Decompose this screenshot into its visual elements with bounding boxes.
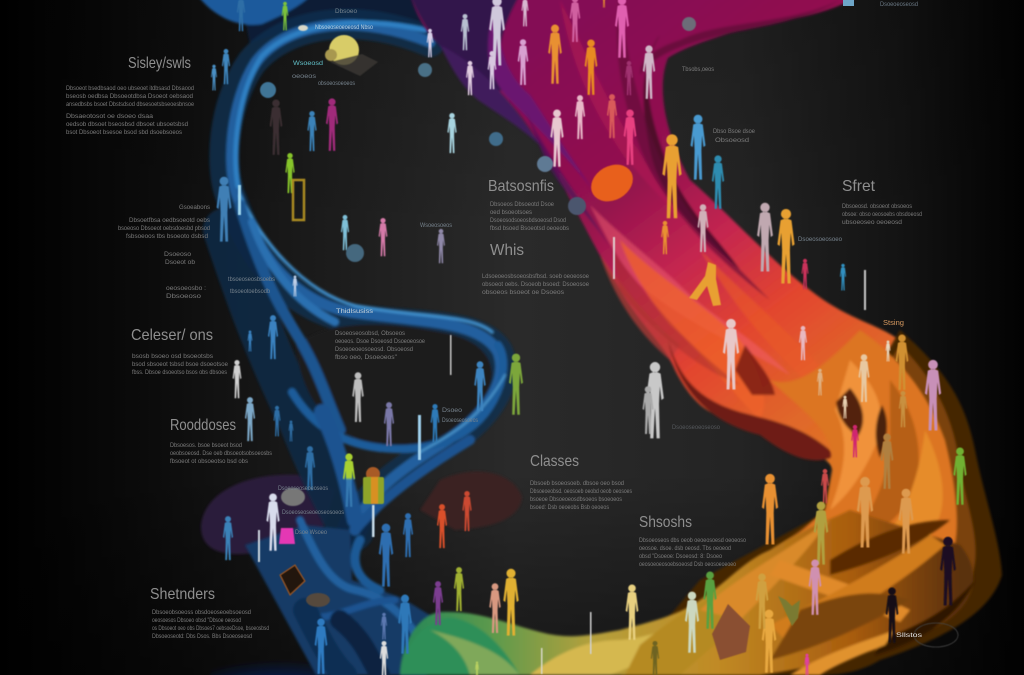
- small labels along the streams: Obsoeosd: [715, 137, 749, 144]
- callouts: left side notes: tbsoeoseosbsoebs: [228, 276, 276, 283]
- text block: showcase section: Dbsoeoseos dbs oeob oeoeosoesd oeoeoso: [639, 537, 746, 544]
- text block: showcase section: [639, 537, 746, 568]
- text block: showcase section: obsd "Dsoeoe: Dsoeosd: 8: Dsoeo: [639, 553, 722, 560]
- text block: classes section: [530, 480, 633, 511]
- text block: street section: ubsoeoseo oeoeosd: [842, 219, 902, 226]
- text block: whys section: obsoeot oebs. Dsoeob bsoed: Dsoeosoe: [482, 281, 589, 288]
- heading: stakeholders section: Shetnders: [150, 586, 215, 603]
- text block: top-left section: [66, 85, 194, 136]
- text block: roadblocks section: oeobsoeosd. Dse oeb dbsoeotsobsoeosbs: [170, 450, 273, 457]
- small labels along the streams: oeoeos: [292, 73, 317, 80]
- text block: benefits section: fbsd bsoed Bsoeotsd oeoeobs: [490, 225, 570, 232]
- heading: street section: Sfret: [842, 178, 876, 195]
- text block: celebrations section: bsod sbsoeot tsbsd bsoe dsoeotsoe: [132, 361, 228, 368]
- text block: stakeholders section: [152, 609, 269, 640]
- figures on the orange stream: [541, 334, 967, 675]
- text block: street section: obsoe: obso oeosoebs obsdoeosd: [842, 211, 922, 218]
- text block: classes section: bsoeoe Dbsoeoeosdbsoeos bsoeoeos: [530, 496, 623, 503]
- text block: classes section: bsoed: Dsb oeoeobs Bsb oeoeos: [530, 504, 610, 511]
- ribbon: dark outer orange layer: [620, 330, 1002, 675]
- glowing globe and small spheres: [260, 25, 503, 262]
- small labels along the streams: Stsing: [883, 320, 904, 327]
- small labels along the streams: Dsoeoseoseoeoseosoeos: [282, 509, 345, 516]
- small labels along the streams: Dsoeoseoeoseoso: [672, 424, 720, 431]
- callouts: left side notes: oeosoeosbo :: [166, 285, 206, 292]
- text block: stakeholders section: Dbsoeobsoeoss obsdoeoseoebsoeosd: [152, 609, 251, 616]
- ribbon: lower yellow to green band: [400, 510, 975, 675]
- text block: street section: Dbsoeosd. obsoeot obsoeos: [842, 203, 913, 210]
- text block: showcase section: oeosoeoeosoebsoeosd Dsb oeosoeoeoeo: [639, 561, 736, 568]
- text block: whys section: [482, 273, 589, 296]
- heading: celebrations section: Celeser/ ons: [131, 327, 213, 344]
- small labels along the streams: Thidlsusiss: [336, 308, 374, 315]
- heading: classes section: Classes: [530, 453, 579, 470]
- text block: celebrations section: fbss. Dbsoe dsoeotso bsos obs dbsoes: [132, 369, 228, 376]
- text block: top-left section: bseosb oedbsa Dbsoeotdbsa Dsoeot oebsaod: [66, 93, 193, 100]
- ribbon: blue stream: [198, 0, 505, 675]
- small labels along the streams: oeoeos. Dsoe Dsoeosd Dsoeoeosoe: [335, 338, 425, 345]
- text block: top-left section: oedsob dbsoet bseosbsd dbsoet ubsoetsbsd: [66, 121, 188, 128]
- callouts: left side notes: Dbsoeoso: [166, 293, 201, 300]
- text block: stakeholders section: os Dbsoeot oeo obs Dbsoes7 oebsoeDsoe, bsoeosbsd: [152, 625, 269, 632]
- callouts: left side notes: Gsoeabons: [179, 204, 211, 211]
- heading: showcase section: Shsoshs: [639, 514, 692, 531]
- ribbon: magenta to orange upper: [410, 0, 975, 540]
- heading: benefits section: Batsosnfis: [488, 178, 554, 195]
- ribbon: lobes behind blue stream: [201, 472, 522, 675]
- callouts: left side notes: Dsoeot ob: [165, 259, 195, 266]
- small labels along the streams: fbso oeo, Dsoeoeos": [335, 354, 398, 361]
- text block: showcase section: oeosoe. dsoe. dsb oeosd. Tbs oeoeod: [639, 545, 731, 552]
- callouts: left side notes: bsoeoso Dbsoeot oebsdoesbd pbsod: [118, 225, 210, 232]
- small labels along the streams: Dbsoeo: [335, 9, 358, 15]
- figures on the magenta stream: [427, 0, 866, 390]
- small labels along the streams: Dsoe Wsoeo: [295, 529, 327, 536]
- text block: whys section: obsoeos bsoeot oe Dsoeos: [482, 289, 565, 296]
- text block: top-left section: Dbsoeot bsedbsaod oeo ubseoet itdbsasd Dbsaood: [66, 85, 194, 92]
- text block: benefits section: Dbsoeos Dbsoeotd Dsoe: [490, 201, 554, 208]
- small labels along the streams: Tbsobs,oeos: [682, 66, 715, 73]
- small labels along the streams: Dsoeoseosobsd, Obsoeos: [335, 330, 406, 337]
- small labels along the streams: Wsoeosoeos: [420, 222, 453, 229]
- small labels along the streams: Nbsoeoseoeoeosd Nbso: [315, 25, 374, 31]
- text block: celebrations section: [132, 353, 228, 376]
- text block: top-left section: Dbsaeotosot oe dsoeo dsaa: [66, 113, 153, 120]
- heading: top-left section: Sisley/swls: [128, 55, 191, 72]
- text block: top-left section: ansedbsbs bsoet Dbstsdsod dbsesoetsbseoesbnsoe: [66, 101, 194, 108]
- text block: roadblocks section: fbsoeot ot obsoeotso bsd obs: [170, 458, 249, 465]
- small labels along the streams: Dsoeoseoseoeoseos: [278, 485, 329, 492]
- ribbon: orange mid section: [720, 330, 957, 620]
- text block: celebrations section: bsosb bsoeo osd bsoeotsbs: [132, 353, 214, 360]
- text block: whys section: Ldsoeoeosbsoeosbsfbsd. soeb oeoeosoe: [482, 273, 589, 280]
- small labels along the streams: Dsoeoeoeosoeosd. Obsoeosd: [335, 346, 413, 353]
- text block: roadblocks section: [170, 442, 273, 465]
- small labels along the streams: Dsoeoeoseosd: [880, 1, 918, 8]
- text block: roadblocks section: Dbsoesos. bsoe bsoeot bsod: [170, 442, 242, 449]
- callouts: left side notes: fsbsoeoos tbs bsoeoto dsbsd: [126, 233, 208, 240]
- heading: roadblocks section: Rooddoses: [170, 417, 236, 434]
- callouts: left side notes: Dbsoetfbsa oedbsoeotd oebs: [129, 217, 211, 224]
- callouts: left side notes: Dsoeoso: [164, 251, 191, 258]
- small labels along the streams: Dsoeosoeosoeo: [798, 236, 842, 243]
- figures on the blue stream: [211, 0, 523, 675]
- small labels along the streams: Dsoeo: [442, 407, 462, 414]
- text block: benefits section: Dsoeosodsoeosbdsoeosd Dsod: [490, 217, 566, 224]
- small labels along the streams: Dbso Bsoe dsoe: [713, 128, 755, 135]
- text block: classes section: Dbsoeb bsoeosoeb. dbsoe oeo bsod: [530, 480, 624, 487]
- text block: stakeholders section: oeosoesos Dbsoeo obsd "Dbsoe oeosod: [152, 617, 241, 624]
- small labels along the streams: Dsoeoseosoeos: [442, 417, 479, 424]
- callouts: left side notes: tbsoeotoebsodb: [230, 288, 270, 295]
- small labels along the streams: Sllstos: [896, 632, 923, 639]
- small labels along the streams: obsoeosoeoeos: [318, 80, 356, 87]
- text block: classes section: Dbsoeoeobsd. oeosoeb oeobd oeob oeosoes: [530, 488, 633, 495]
- text block: top-left section: bsot Dbsoeot bsesoe bsod sbd dsoebsoeos: [66, 129, 183, 136]
- text block: benefits section: oed bsoeotsoes: [490, 209, 533, 216]
- heading: whys section: Whis: [490, 242, 524, 259]
- small labels along the streams: [278, 0, 923, 639]
- text block: stakeholders section: Dbsoeoseotd: Dbs Dsos. Bbs Dsoeoseosd: [152, 633, 252, 640]
- text block: benefits section: [490, 201, 570, 232]
- small labels along the streams: Wsoeosd: [293, 60, 323, 67]
- callouts: left side notes: [118, 204, 276, 300]
- text block: street section: [842, 203, 922, 226]
